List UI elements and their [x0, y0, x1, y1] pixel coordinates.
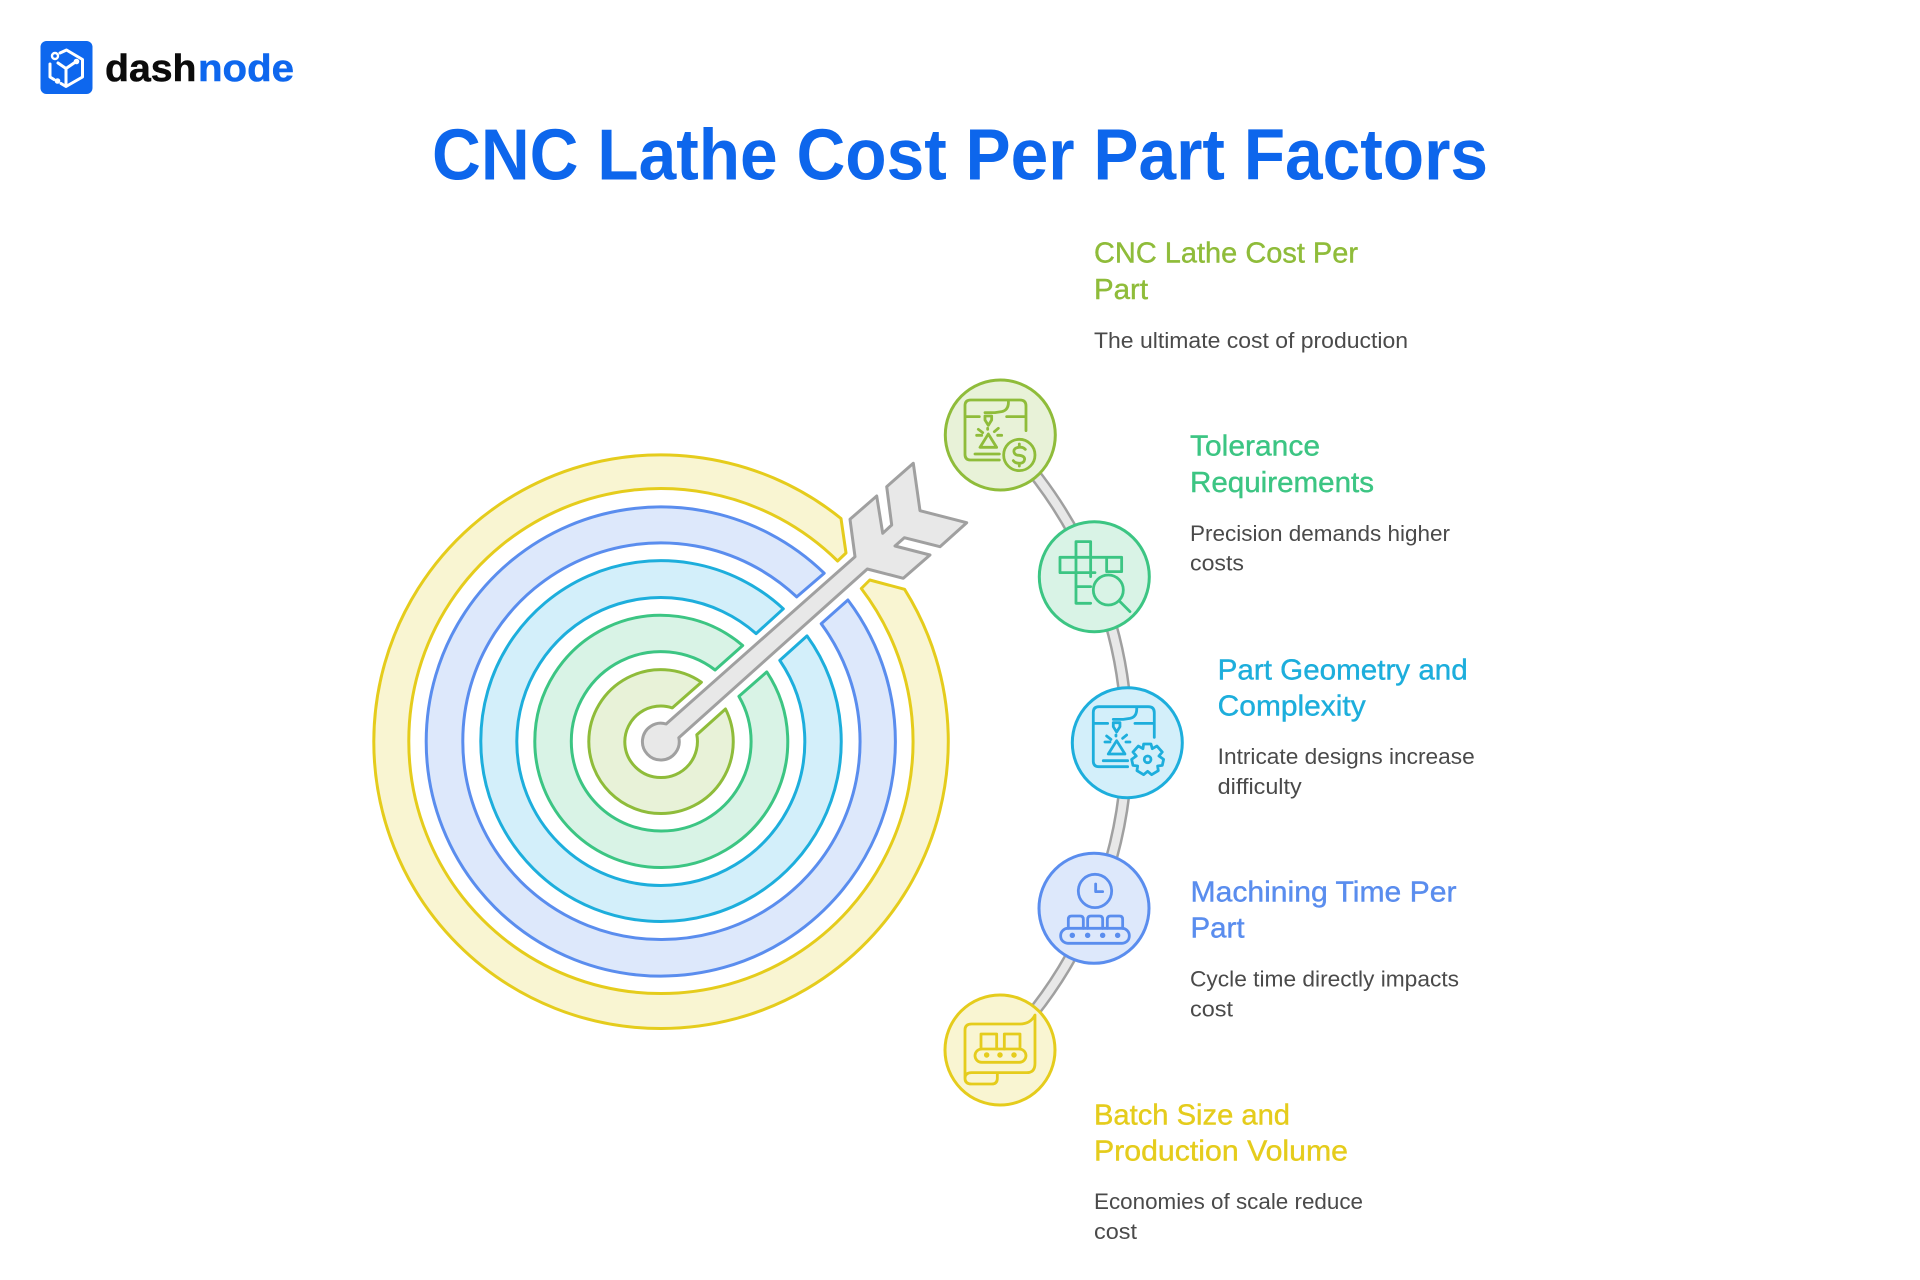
target diagram: [374, 455, 967, 1029]
text block: Machining Time Per Part: Machining Time Per: [1190, 877, 1457, 909]
text block: Batch Size and Production Volume: Production Volume: [1094, 1136, 1348, 1168]
icon: scroll with conveyor: [965, 1015, 1035, 1084]
node 3: geometry: [1072, 688, 1182, 798]
ring: green: [535, 615, 788, 868]
text block: Batch Size and Production Volume: cost: [1094, 1219, 1137, 1244]
icon: printer with dollar: [965, 400, 1035, 471]
text block: Tolerance Requirements: Requirements: [1190, 467, 1374, 499]
ring: lime: [589, 670, 733, 814]
text block: Batch Size and Production Volume: [1094, 1099, 1363, 1244]
text block: Part Geometry and Complexity: difficulty: [1218, 774, 1302, 799]
icon: logo cube: [40, 41, 92, 94]
logo wordmark: node: [198, 48, 294, 90]
logo: dashnode: [40, 41, 294, 94]
node 2: tolerance: [1039, 522, 1149, 632]
text block: Machining Time Per Part: [1190, 877, 1459, 1022]
ring: cyan: [481, 561, 841, 922]
title: CNC Lathe Cost Per Part Factors: [432, 116, 1488, 196]
text block: Part Geometry and Complexity: Intricate designs increase: [1218, 744, 1475, 769]
text block: Part Geometry and Complexity: Part Geometry and: [1218, 654, 1468, 686]
node 5: batch size: [945, 995, 1055, 1105]
text block: Tolerance Requirements: [1190, 431, 1450, 576]
node 4: machining time: [1039, 853, 1149, 963]
text block: Batch Size and Production Volume: Economies of scale reduce: [1094, 1189, 1363, 1214]
text block: CNC Lathe Cost Per Part: Part: [1094, 274, 1148, 306]
connector arc: [1000, 435, 1127, 1050]
icon: printer with gear: [1093, 707, 1164, 775]
text block: Machining Time Per Part: Cycle time directly impacts: [1190, 967, 1459, 992]
text block: Tolerance Requirements: Tolerance: [1190, 431, 1320, 463]
logo wordmark: [105, 48, 294, 90]
text block: Machining Time Per Part: Part: [1190, 913, 1244, 945]
logo wordmark: dash: [105, 48, 196, 90]
icon: clock over conveyor: [1061, 874, 1129, 943]
node 1: cost per part: [945, 380, 1055, 490]
text block: Part Geometry and Complexity: [1218, 654, 1475, 799]
icon: grid with magnifier: [1060, 542, 1130, 612]
text block: CNC Lathe Cost Per Part: [1094, 238, 1408, 353]
text block: Batch Size and Production Volume: Batch Size and: [1094, 1099, 1290, 1131]
text block: Tolerance Requirements: Precision demands higher: [1190, 521, 1450, 546]
text block: CNC Lathe Cost Per Part: The ultimate cost of production: [1094, 328, 1408, 353]
ring: blue: [426, 507, 895, 976]
arrow: [642, 463, 967, 760]
text block: Tolerance Requirements: costs: [1190, 551, 1244, 576]
text block: Machining Time Per Part: cost: [1190, 997, 1233, 1022]
text block: CNC Lathe Cost Per Part: CNC Lathe Cost Per: [1094, 238, 1358, 270]
text block: Part Geometry and Complexity: Complexity: [1218, 690, 1366, 722]
ring: yellow: [374, 455, 948, 1029]
